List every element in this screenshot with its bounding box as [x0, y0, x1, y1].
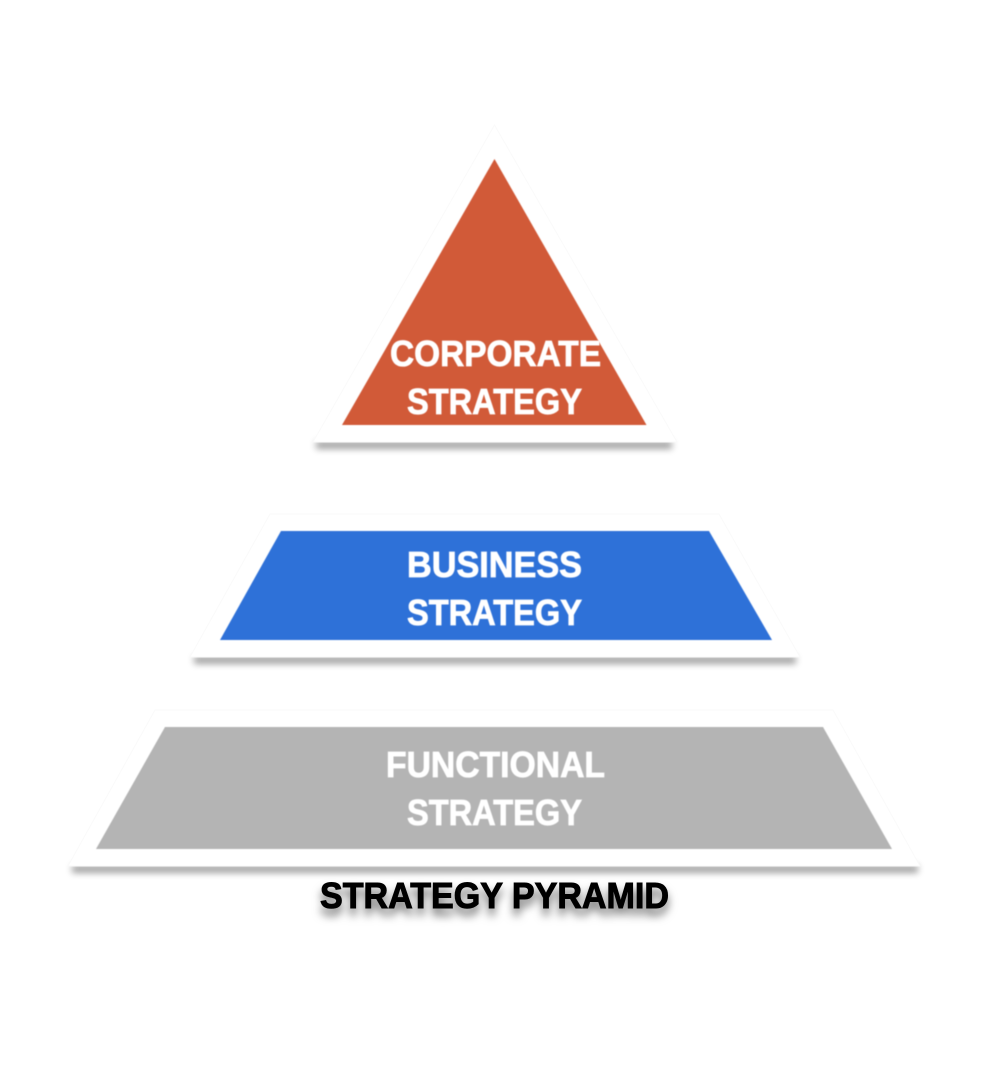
label: functional strategy: STRATEGY — [407, 792, 582, 833]
label: functional strategy — [386, 744, 605, 833]
label: corporate strategy: STRATEGY — [407, 381, 582, 422]
tier: business strategy — [190, 514, 800, 664]
title: strategy pyramid: STRATEGY PYRAMID — [320, 875, 669, 916]
label: functional strategy: FUNCTIONAL — [386, 744, 605, 785]
tier: functional strategy — [68, 710, 920, 873]
label: business strategy: BUSINESS — [407, 544, 582, 585]
label: corporate strategy — [390, 333, 601, 422]
label: business strategy — [407, 544, 582, 633]
label: business strategy: STRATEGY — [407, 592, 582, 633]
label: corporate strategy: CORPORATE — [390, 333, 601, 374]
tier: corporate strategy — [313, 125, 677, 449]
